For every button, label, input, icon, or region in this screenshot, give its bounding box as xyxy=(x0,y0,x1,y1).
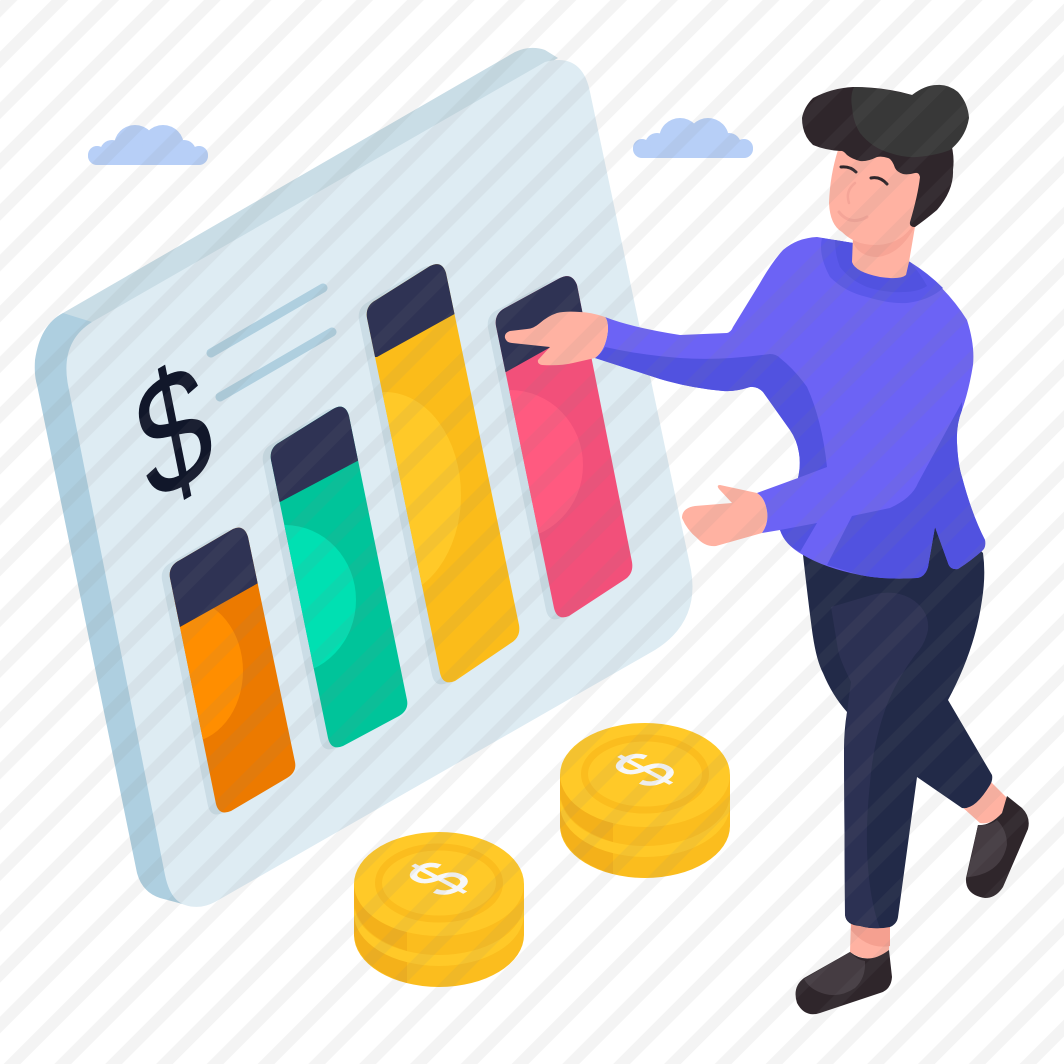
board top edge xyxy=(63,48,558,330)
lower hand xyxy=(682,485,767,546)
back ankle xyxy=(961,781,1007,823)
board face xyxy=(66,60,692,907)
bar: yellow xyxy=(358,264,520,684)
text line two xyxy=(220,332,332,397)
back shoe xyxy=(966,796,1029,898)
hair highlight xyxy=(851,85,969,157)
person xyxy=(505,85,1029,1014)
front shoe xyxy=(796,950,892,1014)
dollar sign: $ xyxy=(122,322,226,541)
eye left xyxy=(841,167,856,172)
sweater xyxy=(595,237,985,579)
face xyxy=(829,148,921,245)
hair xyxy=(802,87,954,227)
cloud left xyxy=(88,125,208,167)
bar: green xyxy=(262,406,408,750)
text line one xyxy=(211,288,323,353)
collar inner xyxy=(835,240,927,292)
eye right xyxy=(871,178,887,184)
board left edge xyxy=(35,313,200,906)
bar: orange xyxy=(162,528,296,814)
neck xyxy=(852,215,917,278)
trouser highlight xyxy=(831,593,928,928)
coin dollar: $ xyxy=(388,851,489,907)
coin dollar: $ xyxy=(594,742,695,798)
upper hand xyxy=(505,312,608,365)
coin stack front xyxy=(354,832,524,987)
bar: pink xyxy=(488,276,632,620)
front ankle xyxy=(850,920,890,959)
coin stack back xyxy=(560,723,730,878)
nose xyxy=(848,183,855,203)
smile xyxy=(839,212,867,221)
sweater hem shadow xyxy=(827,402,985,579)
sweater arm shadow xyxy=(595,347,827,478)
neck shadow xyxy=(853,215,917,257)
cloud right xyxy=(633,118,753,160)
panel: chart board xyxy=(35,48,692,907)
collar outer xyxy=(821,238,943,303)
sweater side shadow xyxy=(780,523,817,552)
trousers xyxy=(803,520,992,928)
